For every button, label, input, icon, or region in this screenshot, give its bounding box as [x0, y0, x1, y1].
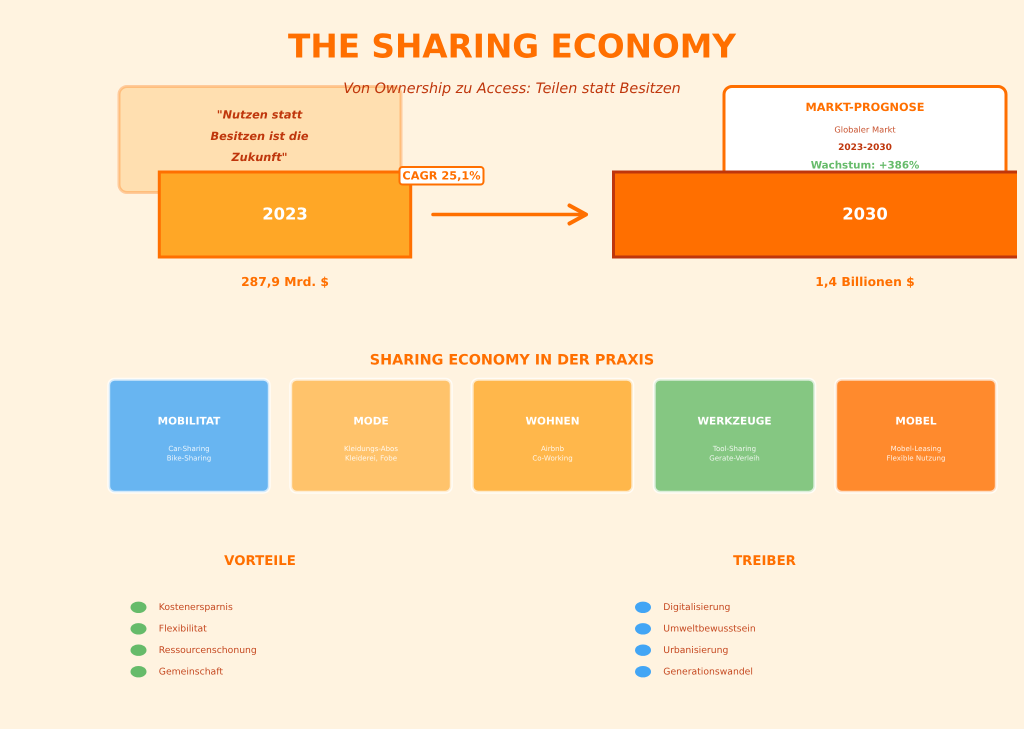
card: fashion	[291, 379, 451, 492]
card: housing: Co-Working	[532, 454, 573, 462]
card: fashion: Kleiderei, Fobe	[345, 454, 397, 462]
card: mobility: Car-Sharing	[168, 444, 210, 453]
panel: market forecast: Globaler Markt	[834, 124, 896, 134]
list: benefits: Ressourcenschonung	[159, 645, 257, 656]
card: mobility: Bike-Sharing	[167, 454, 211, 462]
panel: quote: Zukunft"	[230, 151, 288, 164]
bar: 2030	[614, 172, 1017, 257]
callout: CAGR	[400, 167, 484, 184]
list: benefits: Kostenersparnis	[159, 602, 233, 613]
list: drivers: Digitalisierung	[663, 602, 730, 613]
card: housing	[472, 379, 633, 492]
list: drivers	[635, 602, 756, 678]
card: furniture: Flexible Nutzung	[887, 454, 945, 462]
card: tools: Gerate-Verleih	[709, 454, 760, 462]
card: tools	[654, 379, 815, 492]
callout: CAGR: CAGR 25,1%	[402, 170, 481, 182]
heading: drivers: TREIBER	[733, 554, 796, 569]
heading: benefits: VORTEILE	[224, 554, 296, 569]
panel: market forecast: Wachstum: +386%	[811, 160, 919, 172]
title: THE SHARING ECONOMY	[288, 28, 736, 66]
arrow	[433, 206, 586, 224]
bar: 2030: 2030	[842, 204, 888, 224]
value: 2023: 287,9 Mrd. $	[241, 275, 329, 289]
card: fashion: Kleidungs-Abos	[344, 444, 398, 453]
card: mobility	[109, 379, 269, 492]
list: benefits: Flexibilitat	[159, 624, 207, 634]
panel: market forecast: MARKT-PROGNOSE	[806, 101, 924, 114]
panel: quote	[119, 86, 401, 192]
card: mobility: MOBILITAT	[158, 416, 221, 428]
card: tools: WERKZEUGE	[697, 416, 772, 428]
card: fashion: MODE	[353, 416, 389, 428]
card: furniture: Mobel-Leasing	[891, 444, 941, 453]
list: drivers: Umweltbewusstsein	[663, 624, 756, 634]
panel: market forecast: 2023-2030	[838, 143, 892, 153]
card: furniture	[836, 379, 996, 492]
panel: quote: "Nutzen statt	[217, 108, 303, 122]
section heading: practice: SHARING ECONOMY IN DER PRAXIS	[370, 352, 654, 368]
card: tools: Tool-Sharing	[712, 444, 756, 453]
list: drivers: Urbanisierung	[663, 645, 728, 656]
panel: quote: Besitzen ist die	[210, 130, 309, 143]
value: 2030: 1,4 Billionen $	[815, 275, 915, 289]
list: benefits: Gemeinschaft	[159, 666, 223, 678]
bar: 2023	[159, 172, 411, 257]
subtitle: Von Ownership zu Access: Teilen statt Besitzen	[343, 81, 681, 97]
card: housing: WOHNEN	[525, 416, 580, 428]
list: drivers: Generationswandel	[663, 666, 753, 678]
card: furniture: MOBEL	[895, 416, 937, 428]
card: housing: Airbnb	[541, 444, 565, 453]
panel: market forecast	[724, 86, 1006, 192]
list: benefits	[130, 602, 257, 678]
bar: 2023: 2023	[262, 204, 308, 224]
